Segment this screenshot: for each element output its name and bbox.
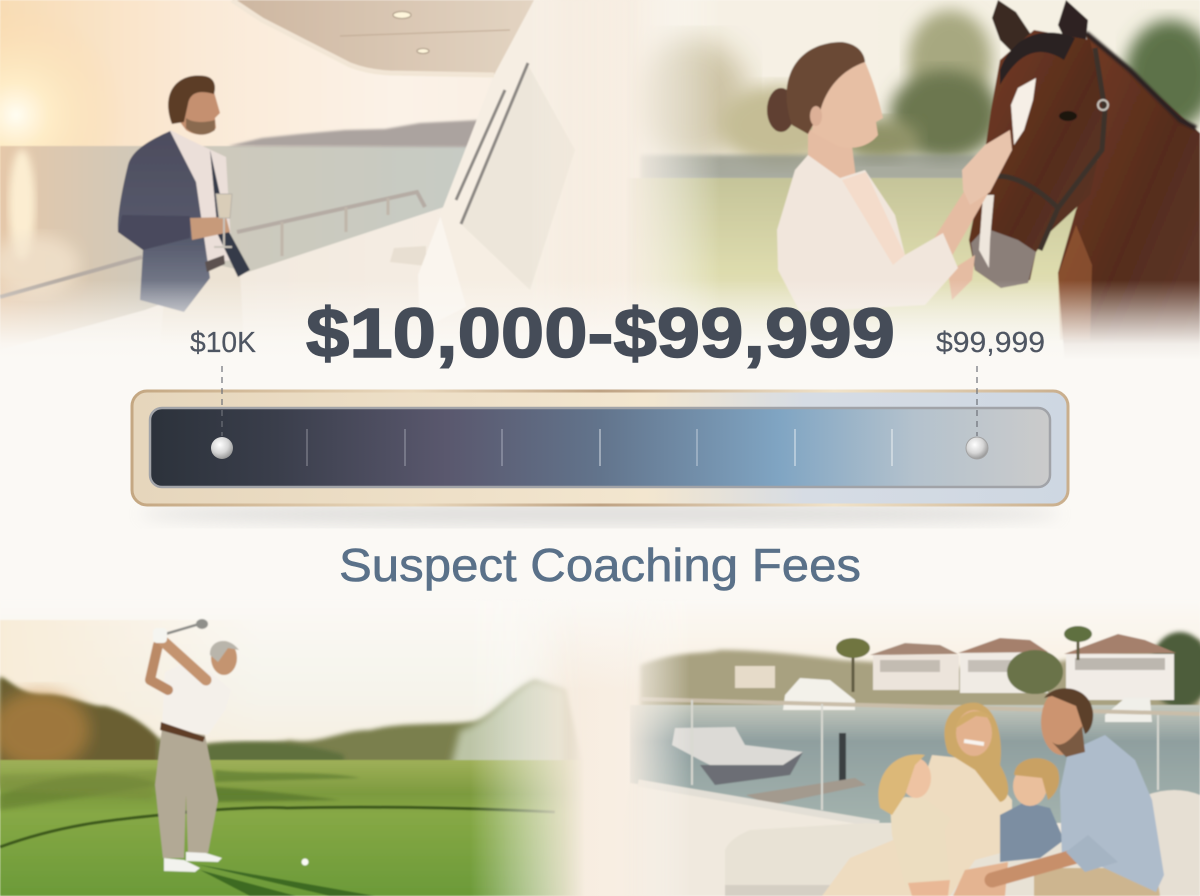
band clear zone behind bar: [480, 360, 720, 600]
waterfront houses: [735, 634, 1176, 700]
bar track gradient: [150, 408, 1050, 487]
title: fee range: $10,000-$99,999: [306, 294, 895, 372]
central blend band: [510, 0, 690, 896]
palm trees: [836, 626, 1092, 692]
figure: mother: [822, 703, 1012, 896]
horse halter: [988, 48, 1105, 250]
horse ears: [992, 0, 1032, 54]
horse head: [969, 30, 1104, 288]
photo: golfer on course: [0, 618, 580, 896]
figure: toddler boy: [953, 758, 1064, 896]
tree line: [0, 677, 590, 790]
page clear zone under top photos: [0, 360, 1200, 390]
range bar: [132, 366, 1068, 505]
figure: golfer: [150, 619, 239, 872]
photo: woman with horse: [620, 0, 1200, 370]
sofa: [725, 790, 1200, 896]
marker: minimum: [211, 366, 233, 459]
moored yacht: [672, 727, 803, 785]
figure: man in blazer: [117, 74, 250, 312]
fade: top photos into page: [0, 280, 1200, 360]
background trees: [640, 640, 1200, 710]
figure: father: [992, 688, 1164, 896]
bar drop shadow: [140, 502, 1060, 526]
figure: woman in cream blouse: [767, 42, 1012, 312]
photo: man on yacht at sunset: [0, 0, 552, 340]
band fade below subtitle: [480, 600, 720, 690]
subtitle: Suspect Coaching Fees: [339, 539, 861, 591]
label: maximum value: $99,999: [936, 327, 1045, 359]
marker: maximum: [966, 366, 988, 459]
tick marks: [307, 429, 892, 466]
photo: family on waterfront terrace: [630, 624, 1200, 896]
figure: toddler girl: [878, 754, 951, 896]
label: minimum value: $10K: [190, 327, 257, 359]
horse neck and body: [1058, 33, 1200, 370]
